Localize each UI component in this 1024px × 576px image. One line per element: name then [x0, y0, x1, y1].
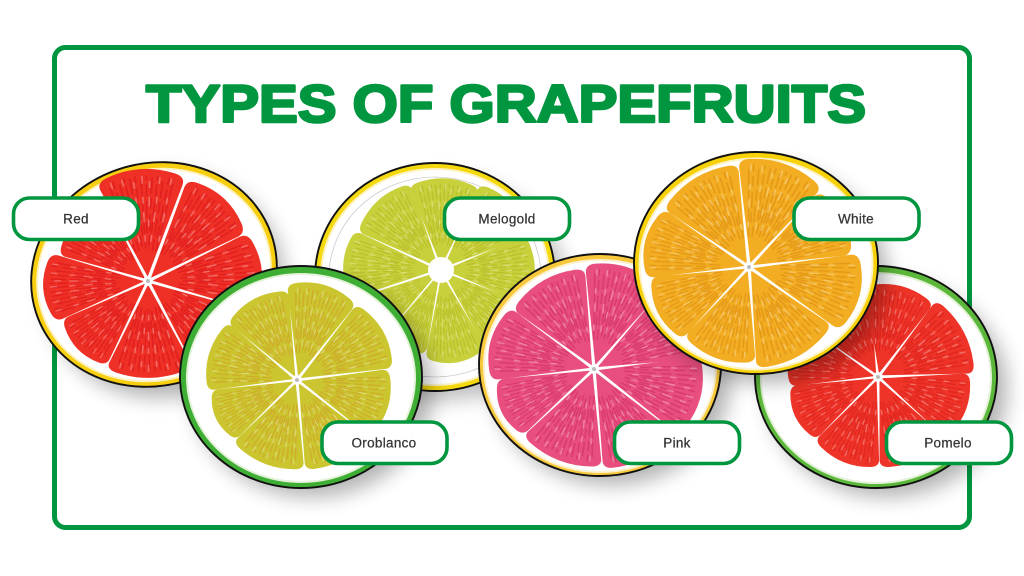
label: White: [794, 198, 919, 240]
pomelo segments: [782, 277, 982, 475]
label: Melogold: Melogold: [478, 212, 536, 226]
label: Pink: Pink: [663, 436, 691, 450]
label: Pomelo: Pomelo: [924, 436, 972, 450]
label: Oroblanco: [322, 422, 447, 464]
white grapefruit segments: [637, 150, 869, 376]
label: White: White: [838, 212, 874, 226]
label: Melogold: [444, 198, 570, 240]
red segments: [41, 166, 265, 379]
frame border: [54, 48, 970, 528]
label: Pomelo: [886, 422, 1012, 464]
melogold segments: [341, 177, 535, 367]
fruit: white grapefruit: [634, 150, 887, 383]
fruit: pomelo: [755, 266, 1007, 497]
title: TYPES OF GRAPEFRUITS: [146, 75, 866, 134]
label: Oroblanco: Oroblanco: [352, 436, 416, 450]
fruit: red grapefruit: [2, 131, 313, 429]
fruit: melogold grapefruit: [315, 163, 566, 400]
label: Red: [14, 198, 138, 240]
oroblanco segments: [199, 276, 400, 477]
label: Red: Red: [63, 212, 89, 226]
fruit: oroblanco grapefruit: [180, 266, 432, 497]
label: Pink: [614, 422, 740, 464]
pink segments: [481, 255, 710, 476]
fruit: pink grapefruit: [479, 254, 731, 485]
